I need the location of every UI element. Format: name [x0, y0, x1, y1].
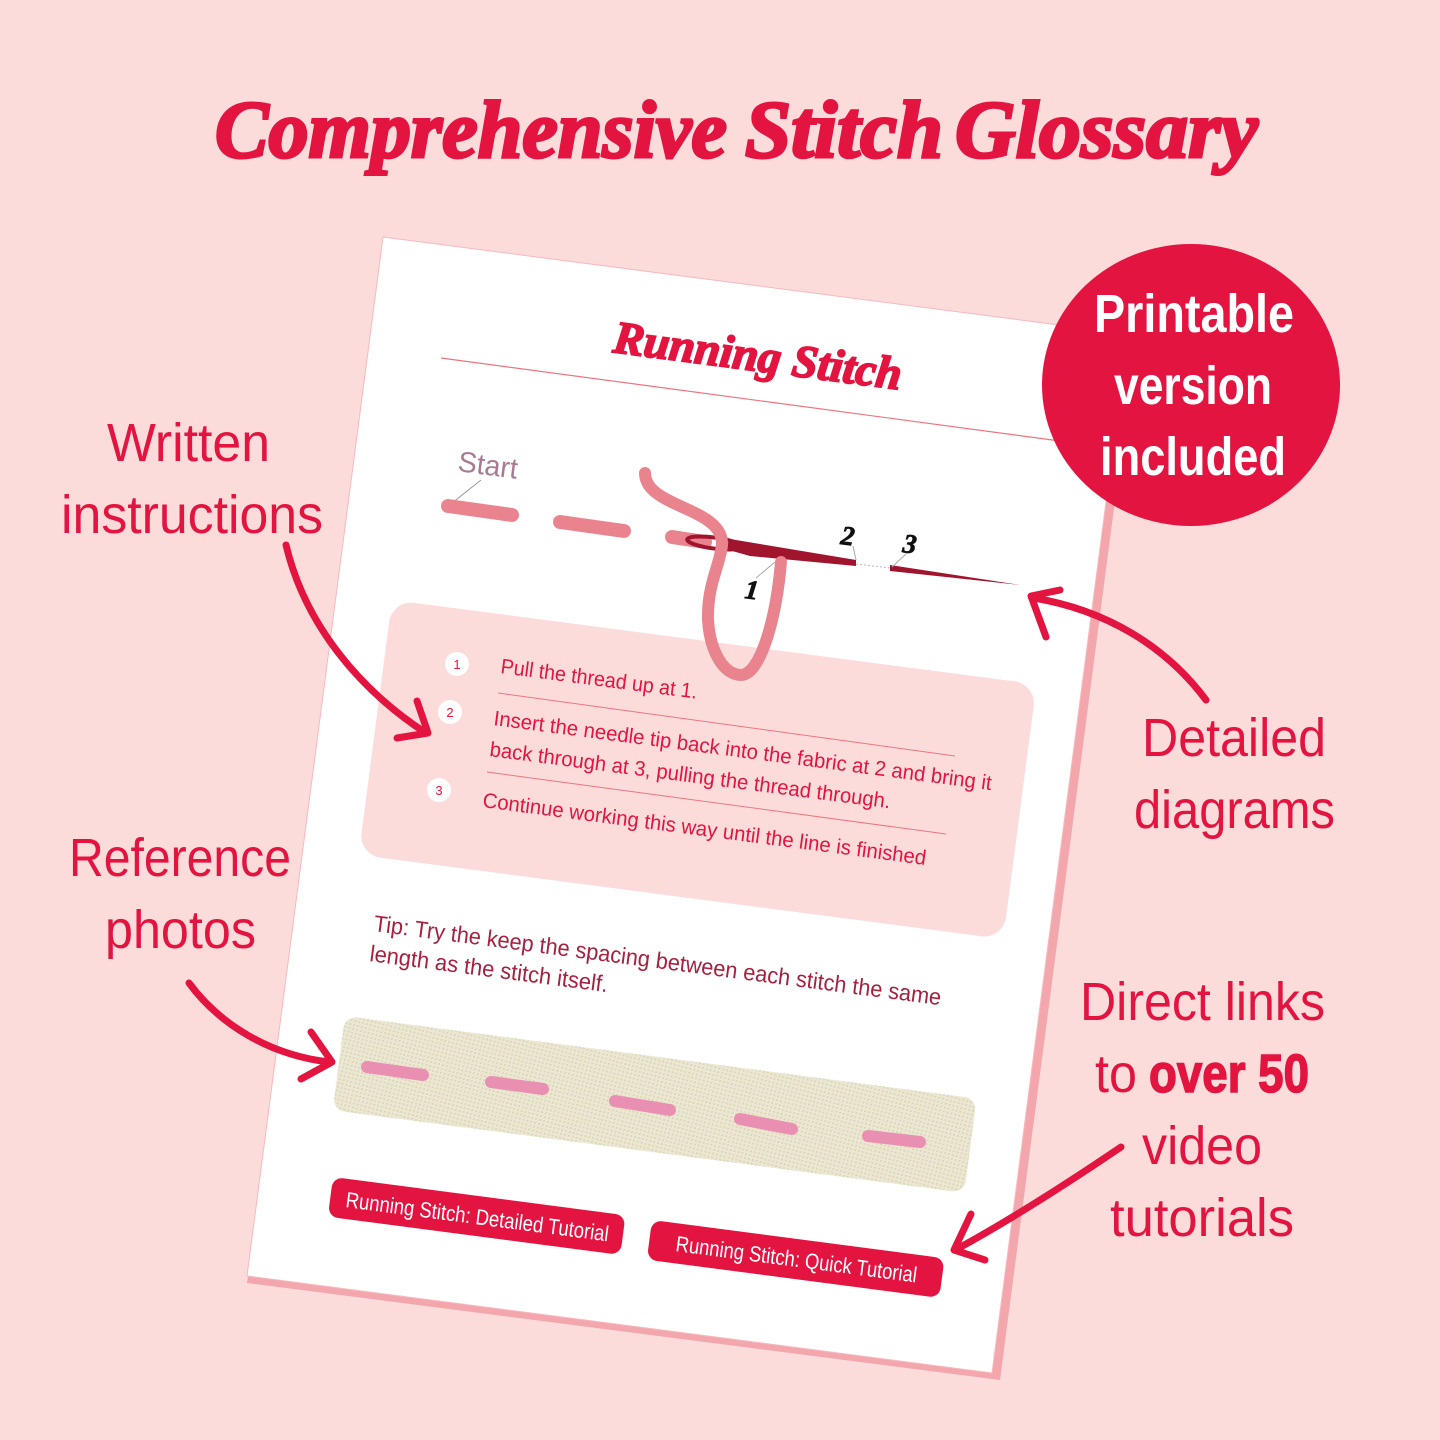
button: detailed tutorial: Running Stitch: Detailed Tutorial	[344, 1187, 610, 1246]
label: direct links: over 50	[1149, 1044, 1309, 1104]
step 1	[445, 652, 699, 704]
arrow: to tutorial buttons	[954, 1147, 1121, 1260]
stitch diagram	[448, 446, 1020, 675]
label: written instructions	[61, 413, 323, 545]
title: Comprehensive	[215, 84, 727, 175]
tip text: Tip: Try the keep the spacing between each stitch the same	[372, 910, 943, 1010]
label: direct links: video	[1142, 1116, 1262, 1176]
needle	[687, 534, 1020, 585]
label: reference photos: photos	[105, 900, 256, 960]
button: quick tutorial: Running Stitch: Quick Tutorial	[674, 1231, 919, 1287]
badge: printable version: included	[1100, 427, 1286, 487]
step 1: 1	[453, 657, 461, 672]
label: written instructions: instructions	[61, 485, 323, 545]
label: direct links	[1080, 972, 1325, 1248]
reference photo	[333, 1016, 977, 1193]
page heading: Running Stitch: Running Stitch	[610, 311, 905, 400]
label: detailed diagrams: diagrams	[1134, 780, 1335, 840]
badge: printable version: version	[1114, 356, 1272, 416]
label: detailed diagrams	[1134, 708, 1335, 840]
step 3: Continue working this way until the line is finished	[481, 789, 928, 870]
step numbers	[743, 520, 918, 606]
panel: instructions	[359, 600, 1037, 939]
thread	[645, 473, 781, 675]
title: Stitch	[745, 84, 943, 175]
arrow: to photo	[189, 983, 332, 1079]
page sheet with shadow	[247, 237, 1136, 1380]
step numbers: 3	[900, 528, 918, 560]
step 2: back through at 3, pulling the thread through.	[488, 738, 892, 813]
label: reference photos	[69, 828, 291, 960]
arrow: to diagram	[1031, 590, 1206, 700]
step 1: Pull the thread up at 1.	[499, 655, 699, 704]
step 3: 3	[435, 783, 443, 798]
title: Glossary	[955, 84, 1259, 175]
label: reference photos: Reference	[69, 828, 291, 888]
start label: Start	[456, 446, 520, 486]
tip text: length as the stitch itself.	[368, 940, 610, 997]
arrow: to instructions	[286, 545, 428, 738]
label: direct links: to	[1095, 1044, 1137, 1104]
title	[215, 84, 1259, 175]
step numbers: 1	[743, 574, 760, 606]
label: direct links: Direct links	[1080, 972, 1325, 1032]
step numbers: 2	[838, 520, 856, 552]
label: detailed diagrams: Detailed	[1142, 708, 1326, 768]
label: written instructions: Written	[107, 413, 270, 473]
badge: printable version: Printable	[1094, 284, 1294, 344]
button: quick tutorial	[647, 1220, 945, 1298]
badge: printable version	[1042, 244, 1340, 526]
heading rule	[441, 358, 1060, 441]
step 2: Insert the needle tip back into the fabric at 2 and bring it	[492, 707, 993, 795]
label: direct links: tutorials	[1110, 1188, 1294, 1248]
step 2: 2	[446, 705, 454, 720]
completed stitches	[448, 506, 705, 542]
